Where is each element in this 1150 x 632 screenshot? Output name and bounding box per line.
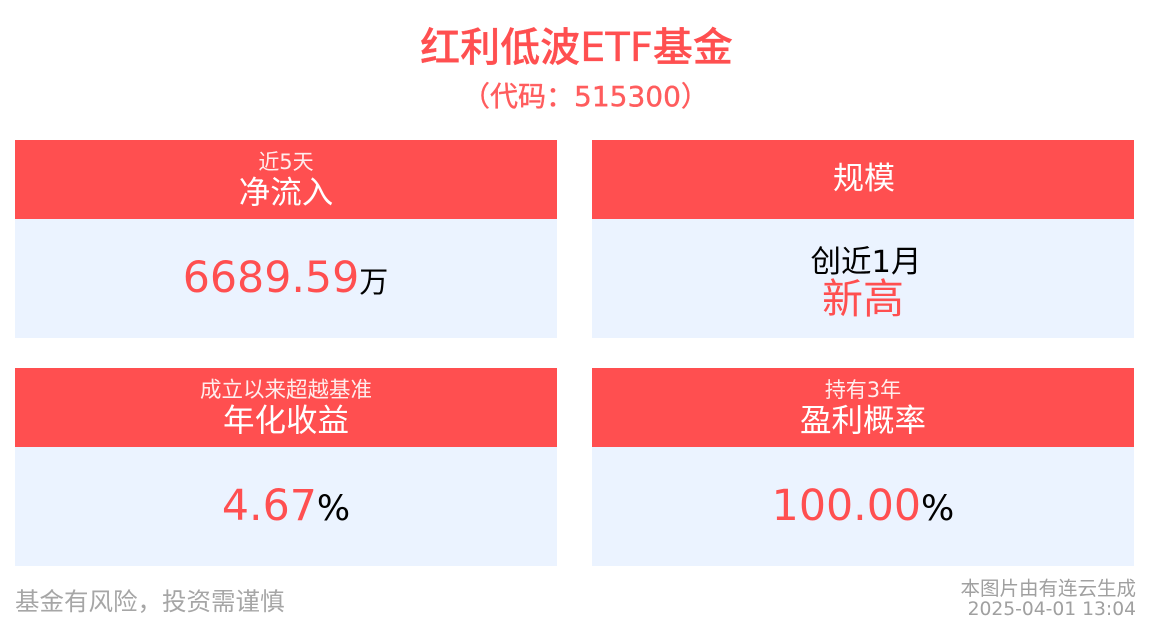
footer: source and timestamp — [960, 577, 1136, 620]
header: win probability — [592, 368, 1134, 447]
caption: last 5 days: 近5天 — [258, 150, 314, 174]
panel: win probability — [592, 368, 1134, 566]
footer: source and timestamp: 本图片由有连云生成 — [960, 577, 1136, 600]
label: scale: 规模 — [833, 161, 895, 197]
body: annualized return — [15, 447, 557, 566]
body: net inflow — [15, 219, 557, 338]
body: win probability — [592, 447, 1134, 566]
panel: scale — [592, 140, 1134, 338]
body: scale — [592, 219, 1134, 338]
footer: risk disclaimer: 基金有风险，投资需谨慎 — [15, 587, 284, 616]
label: win probability: 盈利概率 — [800, 403, 926, 439]
panel: annualized return — [15, 368, 557, 566]
header: net inflow — [15, 140, 557, 219]
text: one-month: 创近1月 — [811, 245, 921, 280]
footer: source and timestamp: 2025-04-01 13:04 — [968, 599, 1136, 620]
title: 红利低波ETF基金 — [420, 25, 733, 71]
subtitle: fund code: （代码：515300） — [462, 80, 709, 113]
label: net inflow: 净流入 — [239, 175, 333, 211]
value: new high: 新高 — [822, 275, 904, 323]
header: annualized return — [15, 368, 557, 447]
value: 6689.59 wan: 6689.59万 — [183, 253, 388, 303]
panel: net inflow — [15, 140, 557, 338]
caption: hold 3 years: 持有3年 — [825, 378, 901, 402]
caption: excess since inception: 成立以来超越基准 — [200, 378, 372, 403]
value: 100.00 percent: 100.00% — [772, 481, 954, 531]
label: annualized return: 年化收益 — [223, 403, 349, 439]
value: 4.67 percent: 4.67% — [222, 481, 350, 531]
header: scale — [592, 140, 1134, 219]
